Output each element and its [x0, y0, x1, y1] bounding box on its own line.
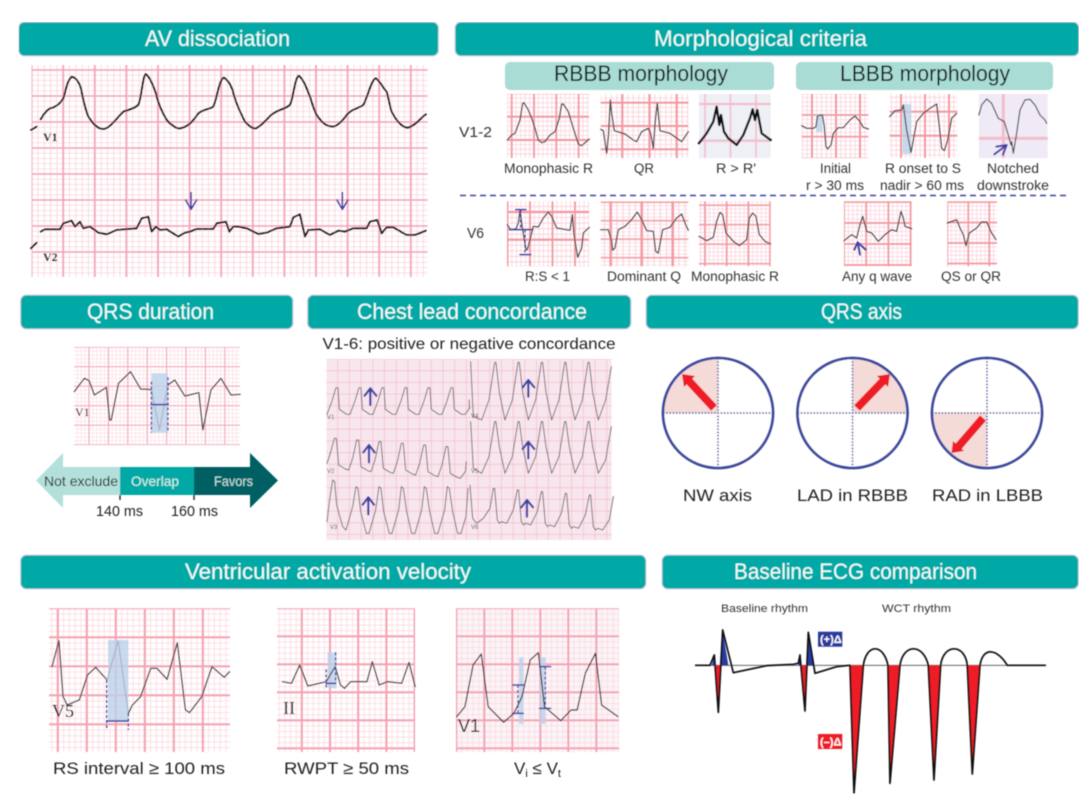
ECG: Dominant Q (V6): Dominant Q: [607, 269, 681, 284]
ECG schematic with delta areas: [695, 630, 1046, 793]
ECG: 6 chest leads: V2: [327, 469, 335, 475]
text: concordance description: V1-6: positive or negative concordance: [322, 336, 616, 353]
ECG: R:S under 1 (V6): R:S < 1: [525, 269, 570, 284]
axis diagram: LAD in RBBB: LAD in RBBB: [797, 486, 908, 505]
heading: Chest lead concordance: Chest lead concordance: [357, 299, 587, 324]
heading: Morphological criteria: Morphological criteria: [654, 26, 868, 51]
subheading: RBBB morphology: RBBB morphology: [554, 61, 728, 86]
ECG: RWPT: [277, 608, 415, 778]
ECG: Monophasic R (V1-2): Monophasic R: [504, 161, 593, 176]
arrow scale: not exclude, overlap, favors: 160 ms: [171, 503, 218, 520]
ECG: QS or QR (V6): [941, 201, 1001, 284]
label: WCT rhythm: WCT rhythm: [882, 603, 951, 615]
ECG: QRS width: [74, 347, 240, 445]
heading: Chest lead concordance: [308, 295, 631, 329]
ECG: Notched downstroke (V1-2): Notched: [987, 161, 1039, 176]
heading: Ventricular activation velocity: Ventricular activation velocity: [185, 559, 471, 584]
ECG strip: V1 and V2: V1: [43, 130, 58, 144]
ECG: Initial r over 30 ms (V1-2): Initial: [820, 161, 851, 176]
ECG: R:S under 1 (V6): [507, 201, 589, 284]
ECG: RS interval: V5: [52, 701, 74, 721]
ECG: Notched downstroke (V1-2): downstroke: [977, 178, 1049, 193]
ECG: 6 chest leads: V1: [327, 415, 335, 421]
label: Baseline rhythm: Baseline rhythm: [721, 603, 808, 615]
ECG: Initial r over 30 ms (V1-2): r > 30 ms: [806, 178, 864, 193]
ECG: Initial r over 30 ms (V1-2): [802, 94, 868, 193]
arrow scale: not exclude, overlap, favors: [36, 453, 278, 520]
panel: QRS duration: [20, 295, 293, 520]
ECG: QR (V1-2): QR: [634, 161, 654, 176]
panel: Ventricular activation velocity: [20, 555, 646, 780]
ECG: Vi and Vt: ≤ V: [528, 759, 559, 778]
ECG: QRS width: V1: [75, 405, 90, 419]
ECG: QS or QR (V6): QS or QR: [941, 269, 1001, 284]
heading: Baseline ECG comparison: Baseline ECG comparison: [734, 559, 977, 584]
heading: Ventricular activation velocity: [20, 555, 646, 589]
ECG: Notched downstroke (V1-2): [977, 94, 1049, 193]
ECG: R greater than R' (V1-2): [699, 94, 771, 176]
panel: Chest lead concordance: [308, 295, 631, 540]
axis diagram: NW axis: NW axis: [683, 486, 752, 505]
heading: QRS duration: [20, 295, 293, 329]
ECG: 6 chest leads: V4: [471, 414, 479, 420]
ECG: QR (V1-2): [601, 94, 688, 176]
ECG strip: V1 and V2: V2: [43, 250, 58, 264]
axis diagram: NW axis: [663, 358, 773, 505]
arrow scale: not exclude, overlap, favors: Overlap: [131, 473, 179, 489]
ECG: Vi and Vt: V1: [458, 716, 480, 736]
ECG: Vi and Vt: t: [558, 768, 561, 780]
heading: AV dissociation: AV dissociation: [145, 26, 290, 51]
ECG: Monophasic R (V6): [691, 201, 779, 284]
lead label: V6: V6: [467, 225, 484, 242]
ECG: Any q wave (V6): Any q wave: [842, 269, 912, 284]
ECG: 6 chest leads: V6: [471, 525, 479, 531]
panel: AV dissociation: [18, 22, 438, 277]
axis diagram: RAD in LBBB: [932, 358, 1043, 505]
tag: positive delta: (+)Δ: [820, 634, 842, 646]
panel: Baseline ECG comparison: [662, 555, 1078, 793]
ECG: 6 chest leads: V5: [471, 469, 479, 475]
ECG: Any q wave (V6): [842, 201, 912, 284]
arrow scale: not exclude, overlap, favors: 140 ms: [96, 503, 143, 520]
heading: AV dissociation: [18, 22, 438, 56]
heading: QRS axis: [646, 295, 1078, 329]
axis diagram: LAD in RBBB: [797, 358, 908, 505]
subheading: LBBB morphology: [796, 61, 1053, 90]
ECG: R onset to S nadir (V1-2): R onset to S: [885, 161, 961, 176]
tag: negative delta: (–)Δ: [820, 736, 841, 748]
heading: QRS duration: QRS duration: [87, 299, 214, 324]
panel: QRS axis: [646, 295, 1078, 505]
ECG: Monophasic R (V1-2): [504, 94, 593, 176]
ECG: Dominant Q (V6): [601, 201, 688, 284]
heading: Baseline ECG comparison: [662, 555, 1078, 589]
arrow: P wave 2: [337, 193, 348, 209]
arrow scale: not exclude, overlap, favors: Not exclude: [44, 473, 118, 489]
ECG: RWPT: II: [283, 698, 295, 718]
ECG: 6 chest leads: [326, 359, 613, 540]
ECG: 6 chest leads: V3: [330, 525, 338, 531]
ECG: Monophasic R (V6): Monophasic R: [691, 269, 779, 284]
ECG: RS interval: [49, 608, 230, 778]
arrow: P wave 1: [186, 193, 197, 209]
ECG strip: V1 and V2: [31, 65, 428, 277]
ECG: RWPT: RWPT ≥ 50 ms: [284, 759, 409, 778]
ECG: RS interval: RS interval ≥ 100 ms: [53, 759, 225, 778]
subheading: RBBB morphology: [505, 61, 774, 90]
heading: Morphological criteria: [455, 22, 1079, 56]
ECG: Vi and Vt: i: [525, 768, 528, 780]
panel: Morphological criteria: [455, 22, 1079, 284]
ECG: Vi and Vt: [456, 608, 619, 780]
arrow scale: not exclude, overlap, favors: Favors: [214, 473, 253, 489]
axis diagram: RAD in LBBB: RAD in LBBB: [932, 486, 1043, 505]
ECG: R onset to S nadir (V1-2): [880, 94, 964, 193]
subheading: LBBB morphology: LBBB morphology: [840, 61, 1010, 86]
lead label: V1-2: V1-2: [459, 124, 492, 141]
ECG: R onset to S nadir (V1-2): nadir > 60 ms: [880, 178, 964, 193]
ECG: Vi and Vt: V: [514, 759, 525, 778]
heading: QRS axis: QRS axis: [821, 299, 902, 324]
ECG: R greater than R' (V1-2): R > R': [716, 161, 756, 176]
